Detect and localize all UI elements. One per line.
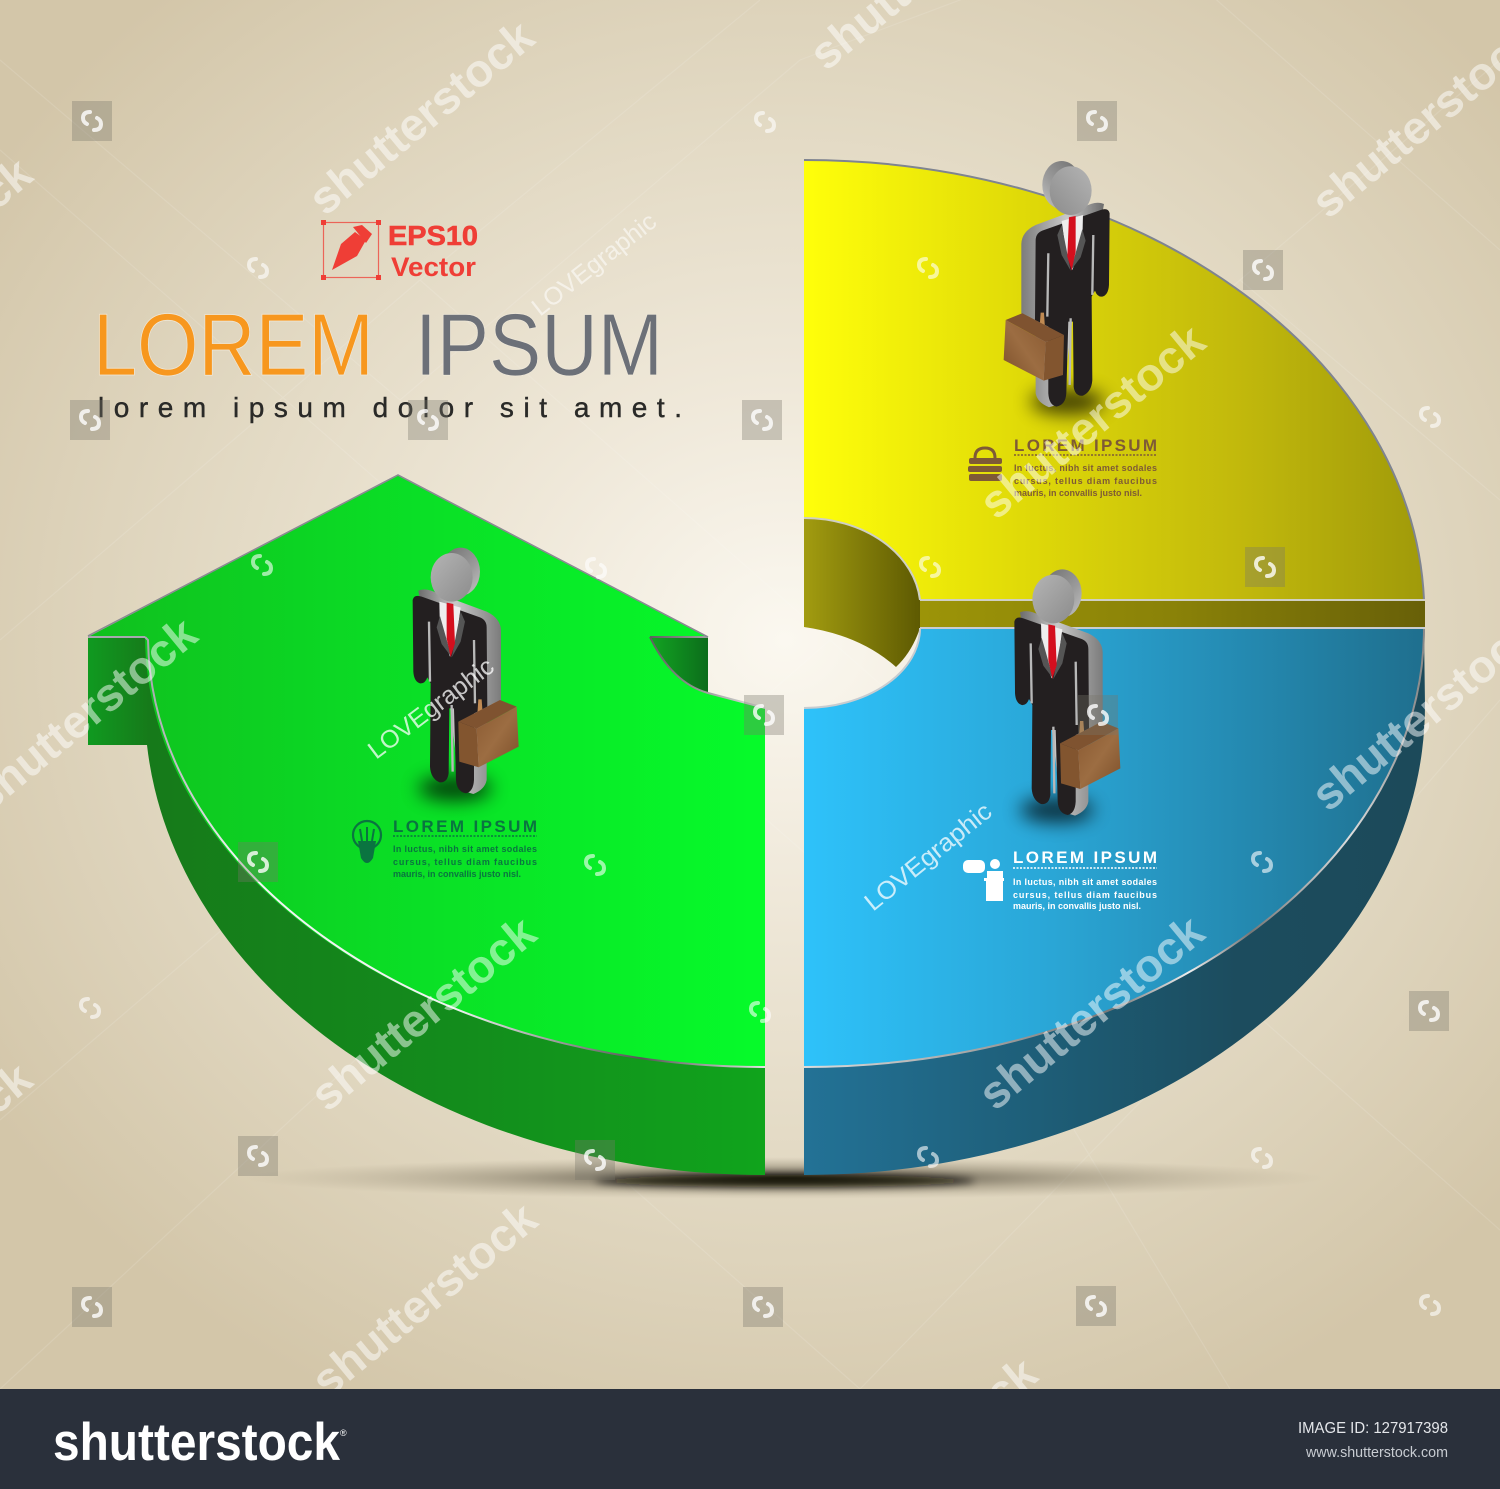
heading: yellow panel: LOREM IPSUM bbox=[1014, 436, 1157, 455]
text: EPS10: EPS10 bbox=[388, 220, 478, 251]
watermark: LOVEgraphic bbox=[363, 207, 997, 917]
footer registered mark: ® bbox=[340, 1428, 347, 1438]
watermark: LOVEgraphic: LOVEgraphic bbox=[363, 652, 499, 765]
watermark: swirl marks in boxes bbox=[70, 101, 1449, 1327]
panel: blue segment bbox=[804, 628, 1425, 1175]
icon: businessman on yellow bbox=[1004, 161, 1110, 414]
watermark: LOVEgraphic: LOVEgraphic bbox=[526, 207, 662, 322]
heading: green panel: LOREM IPSUM bbox=[393, 817, 537, 836]
icon: pen nib in selection box bbox=[321, 220, 381, 280]
body: blue panel: mauris, in convallis justo nisl. bbox=[1013, 901, 1141, 911]
footer image id: IMAGE ID: 127917398 bbox=[1298, 1420, 1448, 1437]
blue side wall bbox=[804, 628, 1425, 1175]
watermark: loose swirl marks bbox=[81, 113, 1439, 1314]
body: yellow panel: mauris, in convallis justo nisl. bbox=[1014, 488, 1142, 498]
icon: speaker at podium bbox=[963, 859, 1004, 901]
body: green panel: cursus, tellus diam faucibus bbox=[393, 857, 537, 867]
watermark: shutterstock: shutterstock bbox=[300, 905, 546, 1121]
floor shadow bbox=[245, 1157, 1325, 1199]
logo: EPS10 Vector badge bbox=[321, 220, 478, 282]
body: blue panel: cursus, tellus diam faucibus bbox=[1013, 890, 1157, 900]
icon: light bulb bbox=[353, 821, 381, 863]
watermark: shutterstock: shutterstock bbox=[968, 904, 1214, 1120]
watermark: shutterstock: shutterstock bbox=[298, 9, 544, 225]
icon: businessman on green bbox=[413, 548, 519, 801]
heading: blue panel: LOREM IPSUM bbox=[1013, 848, 1157, 867]
body: yellow panel: In luctus, nibh sit amet sodales bbox=[1014, 463, 1157, 473]
text: Vector: Vector bbox=[391, 252, 477, 282]
body: green panel: In luctus, nibh sit amet sodales bbox=[393, 844, 537, 854]
title bbox=[93, 295, 663, 394]
green arrow notch wall bbox=[650, 637, 708, 693]
green arrow side wall bbox=[88, 635, 765, 1175]
body: green panel: mauris, in convallis justo nisl. bbox=[393, 869, 521, 879]
body: yellow panel: cursus, tellus diam faucibus bbox=[1014, 476, 1157, 486]
title: LOREM bbox=[93, 295, 374, 394]
body: blue panel: In luctus, nibh sit amet sodales bbox=[1013, 877, 1157, 887]
green arrow top face bbox=[88, 475, 765, 1067]
watermark: shutterstock: shutterstock bbox=[969, 313, 1215, 529]
yellow top face bbox=[804, 160, 1424, 600]
panel: yellow segment bbox=[804, 160, 1425, 667]
footer url: www.shutterstock.com bbox=[1305, 1444, 1448, 1461]
watermark: shutterstock: shutterstock bbox=[301, 1191, 547, 1407]
footer logo: shutterstock bbox=[53, 1413, 340, 1472]
icon: padlock bbox=[968, 448, 1002, 481]
footer bar bbox=[0, 1389, 1500, 1489]
subtitle: lorem ipsum dolor sit amet. bbox=[98, 392, 682, 423]
icon: businessman on blue bbox=[1014, 569, 1120, 823]
text block: green panel bbox=[393, 817, 537, 879]
panel: green arrow segment bbox=[88, 475, 765, 1175]
title: IPSUM bbox=[415, 295, 663, 394]
watermark: LOVEgraphic: LOVEgraphic bbox=[859, 797, 997, 917]
yellow inner wall bbox=[804, 518, 920, 667]
yellow band wall bbox=[920, 600, 1425, 628]
blue top face bbox=[804, 628, 1424, 1067]
text block: blue panel bbox=[1013, 848, 1157, 911]
text block: yellow panel bbox=[1014, 436, 1157, 498]
